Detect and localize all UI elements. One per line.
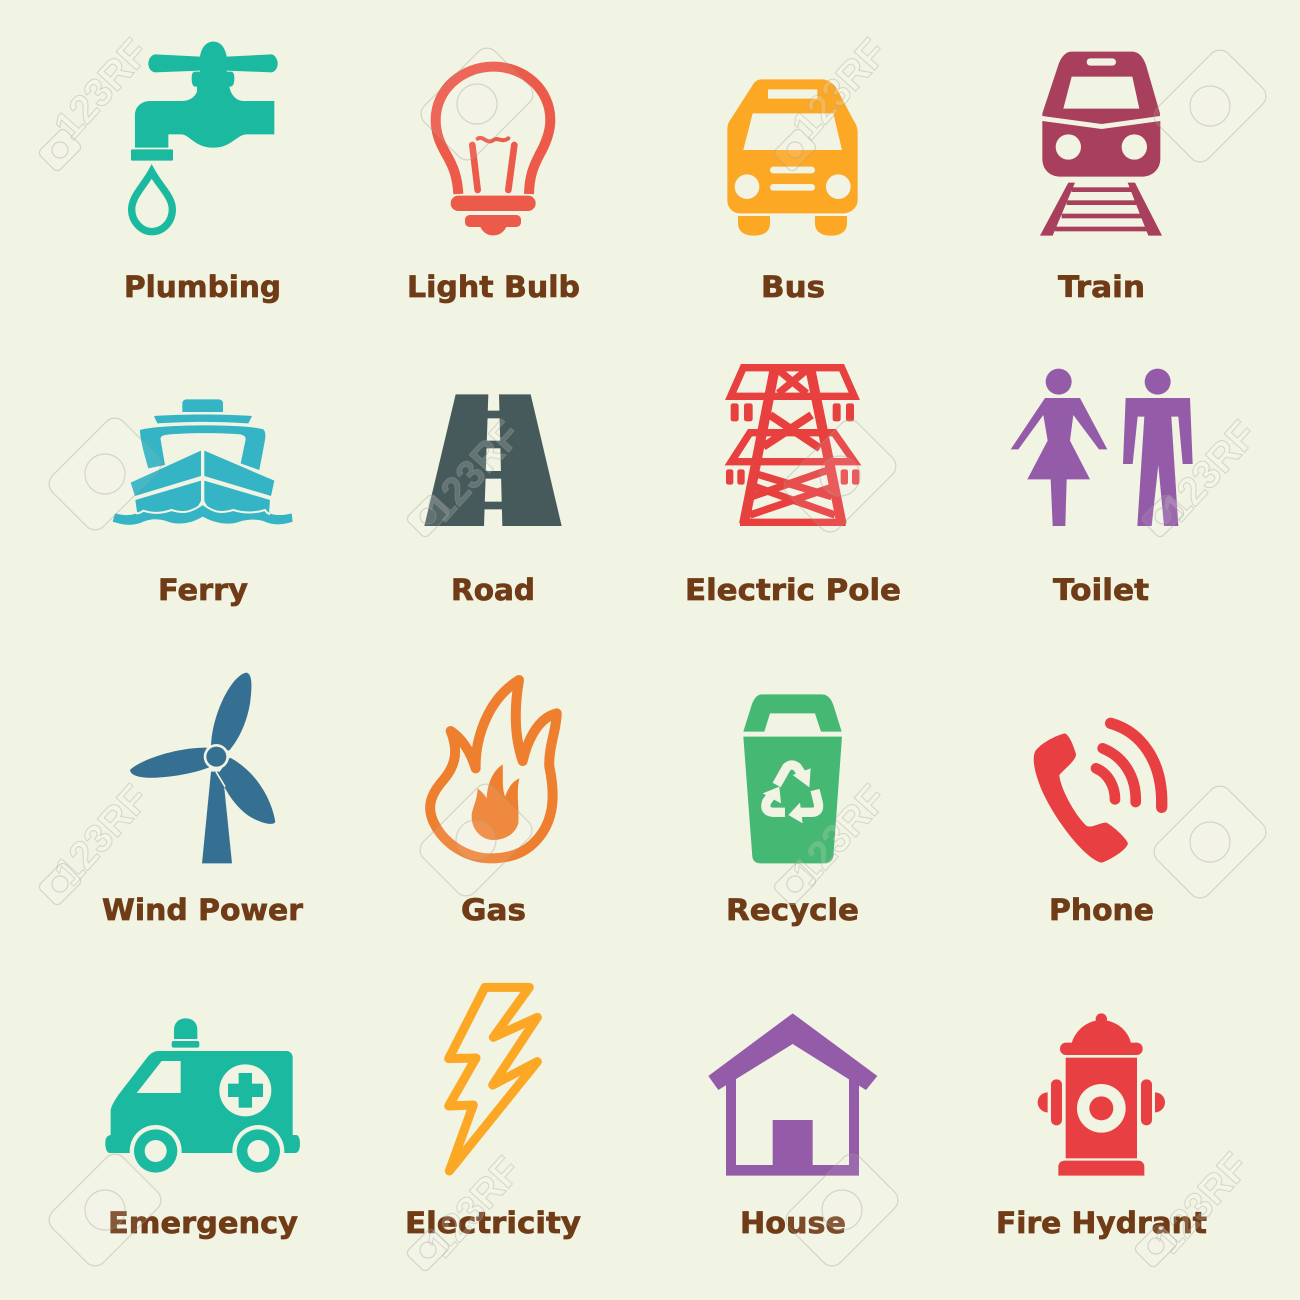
label: Train: Train — [1058, 270, 1145, 304]
watermark overlay: 123RF — [418, 413, 530, 530]
label: Bus: Bus — [761, 270, 825, 304]
label: Toilet: Toilet — [1053, 573, 1149, 607]
icon: ferry — [113, 399, 293, 525]
label: Road: Road — [451, 573, 535, 607]
icon: toilet figures — [1011, 369, 1193, 526]
icon: ambulance — [105, 1018, 300, 1177]
label: Electricity: Electricity — [405, 1206, 581, 1240]
label: Fire Hydrant: Fire Hydrant — [996, 1206, 1207, 1240]
icon: fire hydrant — [1038, 1013, 1165, 1176]
label: Phone: Phone — [1049, 893, 1154, 927]
icon: plumbing tap — [131, 42, 278, 232]
label: Light Bulb: Light Bulb — [407, 270, 580, 304]
icon: gas flame — [430, 680, 557, 858]
label: House: House — [740, 1206, 846, 1240]
label: Recycle: Recycle — [726, 893, 859, 927]
icon: wind turbine — [130, 673, 275, 863]
icon: phone with signal — [1034, 723, 1162, 863]
icon: electric pole — [726, 367, 859, 524]
label: Emergency: Emergency — [108, 1206, 298, 1240]
watermark overlay: 123RF — [46, 31, 158, 148]
watermark overlay: 123RF — [1154, 413, 1266, 530]
watermark overlay: 123RF — [46, 777, 158, 894]
label: Wind Power: Wind Power — [102, 893, 304, 927]
watermark overlay: 123RF — [784, 31, 896, 148]
label: Ferry: Ferry — [158, 573, 248, 607]
label: Plumbing: Plumbing — [124, 270, 281, 304]
icon: lightning bolt — [449, 987, 537, 1171]
watermark overlay: 123RF — [1146, 1145, 1258, 1262]
icon: light bulb — [436, 67, 550, 235]
icon: recycle bin — [743, 694, 842, 863]
watermark overlay: 123RF — [784, 777, 896, 894]
icon: road — [424, 394, 562, 526]
label: Electric Pole: Electric Pole — [685, 573, 901, 607]
icon: train — [1040, 52, 1162, 236]
watermark overlay: 123RF — [418, 1149, 530, 1266]
icon: house — [708, 1013, 877, 1176]
label: Gas: Gas — [461, 893, 526, 927]
icon: bus — [727, 79, 858, 236]
